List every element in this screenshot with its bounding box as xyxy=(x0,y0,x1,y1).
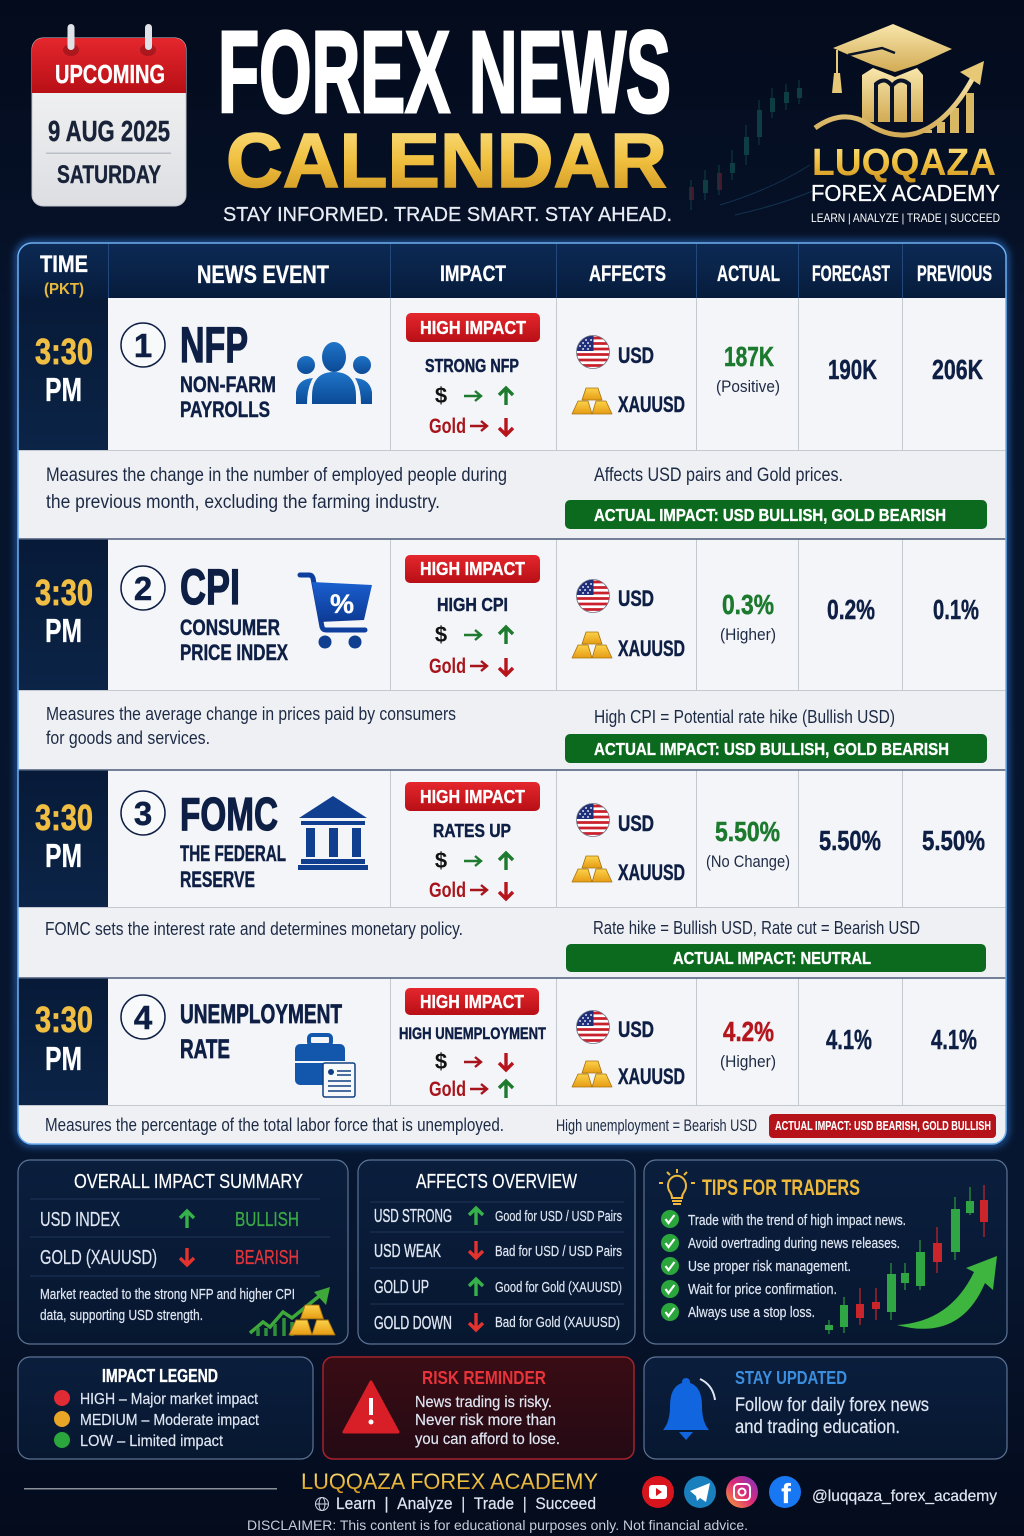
event number xyxy=(121,566,165,610)
gold up row: GOLD UP xyxy=(374,1277,429,1297)
actual: 0.3% xyxy=(722,589,774,620)
market summary text: Market reacted to the strong NFP and higher CPI xyxy=(40,1286,295,1303)
calendar badge xyxy=(32,24,186,206)
actual: 4.2% xyxy=(723,1016,774,1047)
table header: ACTUAL xyxy=(717,261,780,286)
affects: USD xyxy=(618,811,654,836)
impact: HIGH IMPACT xyxy=(420,559,525,579)
logo: FOREX ACADEMY xyxy=(811,180,1000,206)
previous: 4.1% xyxy=(931,1024,977,1055)
description xyxy=(46,465,507,513)
table header: (PKT) xyxy=(44,281,84,298)
table header xyxy=(40,251,992,298)
panel: overall impact summary xyxy=(18,1160,348,1344)
gold row: BEARISH xyxy=(235,1247,299,1269)
impact: HIGH CPI xyxy=(437,595,508,615)
row 1: NFP xyxy=(35,313,987,529)
event name xyxy=(180,999,342,1064)
icon: warning triangle xyxy=(344,1382,398,1432)
actual xyxy=(720,1016,776,1071)
previous: 0.1% xyxy=(933,594,979,625)
previous: 5.50% xyxy=(922,825,985,856)
forecast: 0.2% xyxy=(827,594,875,625)
gold row xyxy=(40,1247,299,1269)
actual: (Higher) xyxy=(720,1052,776,1071)
background chart: faint candlesticks xyxy=(689,80,815,215)
affects: XAUUSD xyxy=(618,1064,685,1089)
table header: IMPACT xyxy=(440,261,506,286)
risk text: Never risk more than xyxy=(415,1412,556,1429)
calendar date: 9 AUG 2025 xyxy=(48,116,170,148)
title: CALENDAR xyxy=(226,118,667,204)
row 3: FOMC xyxy=(35,782,986,972)
icon: gold bars and chart xyxy=(250,1287,335,1336)
previous: 206K xyxy=(932,354,983,385)
impact xyxy=(405,555,540,678)
event name: RATE xyxy=(180,1034,230,1064)
event name: NFP xyxy=(180,317,248,373)
icon: shopping cart: % xyxy=(330,589,354,619)
forecast: 4.1% xyxy=(826,1024,872,1055)
event number: 3 xyxy=(134,795,152,832)
social icons: f xyxy=(781,1478,791,1509)
event name: RESERVE xyxy=(180,867,255,892)
actual: 5.50% xyxy=(715,816,780,847)
event name: PAYROLLS xyxy=(180,397,270,422)
risk text xyxy=(415,1394,560,1448)
market note: High unemployment = Bearish USD xyxy=(556,1116,757,1135)
event number xyxy=(121,791,165,835)
footer brand: Learn | Analyze | Trade | Succeed xyxy=(336,1494,596,1513)
forecast: 190K xyxy=(828,354,877,385)
tips list: Trade with the trend of high impact news. xyxy=(688,1212,906,1229)
time xyxy=(35,999,93,1077)
USD weak row: Bad for USD / USD Pairs xyxy=(495,1243,622,1260)
icon: bell xyxy=(663,1378,715,1440)
description: the previous month, excluding the farming industry. xyxy=(46,492,440,513)
title: FOREX NEWS xyxy=(218,7,671,137)
event name: PRICE INDEX xyxy=(180,640,288,665)
USD index row xyxy=(40,1209,299,1231)
impact: $ xyxy=(435,383,447,408)
event name: NON-FARM xyxy=(180,372,276,397)
event number xyxy=(121,995,165,1039)
impact: $ xyxy=(435,1049,447,1074)
impact xyxy=(406,313,540,438)
table header: NEWS EVENT xyxy=(197,261,329,289)
table header: TIME xyxy=(40,251,88,278)
impact: Gold xyxy=(429,415,466,438)
actual xyxy=(720,589,776,644)
actual impact banner xyxy=(566,944,986,972)
gold up row: Good for Gold (XAUUSD) xyxy=(495,1279,622,1296)
market note: Affects USD pairs and Gold prices. xyxy=(594,465,843,486)
time xyxy=(35,331,93,408)
tips list: Always use a stop loss. xyxy=(688,1304,815,1321)
panel heading: TIPS FOR TRADERS xyxy=(702,1175,860,1200)
footer brand: LUQQAZA FOREX ACADEMY xyxy=(301,1469,598,1494)
calendar label: UPCOMING xyxy=(55,59,165,89)
footer brand xyxy=(24,1469,598,1513)
legend: medium: MEDIUM – Moderate impact xyxy=(80,1412,259,1429)
affects xyxy=(572,1010,685,1089)
row 4: Unemployment xyxy=(35,988,996,1138)
affects xyxy=(572,579,685,661)
actual xyxy=(706,816,790,871)
time: PM xyxy=(45,1040,82,1077)
table header: AFFECTS xyxy=(589,261,666,286)
market summary text: data, supporting USD strength. xyxy=(40,1307,203,1324)
table header: FORECAST xyxy=(812,261,890,286)
affects: USD xyxy=(618,586,654,611)
impact: $ xyxy=(435,622,447,647)
title xyxy=(218,7,671,204)
USD weak row xyxy=(374,1241,622,1261)
affects: USD xyxy=(618,1017,654,1042)
market note: Rate hike = Bullish USD, Rate cut = Bearish USD xyxy=(593,918,920,938)
actual: (No Change) xyxy=(706,852,790,871)
event number: 2 xyxy=(134,570,152,607)
event name xyxy=(180,788,286,892)
legend: low: LOW – Limited impact xyxy=(80,1433,223,1450)
event number: 4 xyxy=(134,999,153,1036)
disclaimer: DISCLAIMER: This content is for educational purposes only. Not financial advice. xyxy=(247,1517,748,1533)
impact: Gold xyxy=(429,1078,466,1101)
description: Measures the change in the number of employed people during xyxy=(46,465,507,486)
social handle: @luqqaza_forex_academy xyxy=(812,1488,997,1505)
time: PM xyxy=(45,612,82,649)
time: 3:30 xyxy=(35,797,93,838)
event name: CONSUMER xyxy=(180,615,280,640)
impact: HIGH UNEMPLOYMENT xyxy=(399,1024,546,1043)
icon: bank xyxy=(298,796,368,870)
impact: RATES UP xyxy=(433,821,511,841)
panel: affects overview xyxy=(358,1160,635,1344)
impact: HIGH IMPACT xyxy=(420,992,524,1012)
actual impact banner xyxy=(565,500,987,529)
description: for goods and services. xyxy=(46,728,210,748)
legend: high: HIGH – Major market impact xyxy=(80,1391,258,1408)
forecast: 5.50% xyxy=(819,825,881,856)
icon: shopping cart xyxy=(300,575,372,648)
impact: $ xyxy=(435,848,447,873)
icon: briefcase with resume xyxy=(295,1035,355,1097)
actual impact banner xyxy=(769,1114,996,1138)
event name: FOMC xyxy=(180,788,278,840)
USD index row: BULLISH xyxy=(235,1209,299,1231)
panel: calendar table xyxy=(18,243,1006,1144)
impact: HIGH IMPACT xyxy=(420,787,525,807)
tagline: STAY INFORMED. TRADE SMART. STAY AHEAD. xyxy=(223,204,672,226)
description: Measures the average change in prices paid by consumers xyxy=(46,704,456,724)
icon: light bulb xyxy=(659,1169,695,1204)
panel heading: IMPACT LEGEND xyxy=(102,1366,218,1386)
gold down row: Bad for Gold (XAUUSD) xyxy=(495,1314,620,1331)
event name xyxy=(180,317,276,422)
time: 3:30 xyxy=(35,331,93,372)
event name xyxy=(180,559,288,665)
logo xyxy=(811,24,1000,225)
actual impact banner: ACTUAL IMPACT: USD BULLISH, GOLD BEARISH xyxy=(594,505,946,525)
gold row: GOLD (XAUUSD) xyxy=(40,1247,157,1269)
impact: STRONG NFP xyxy=(425,356,519,376)
event number xyxy=(121,323,165,367)
description xyxy=(46,704,456,748)
event number: 1 xyxy=(134,327,152,364)
affects xyxy=(572,803,685,885)
event name: CPI xyxy=(180,559,240,615)
USD strong row: Good for USD / USD Pairs xyxy=(495,1208,622,1225)
tips list: Avoid overtrading during news releases. xyxy=(688,1235,900,1252)
time xyxy=(35,572,93,649)
icon: globe xyxy=(316,1498,328,1510)
affects: USD xyxy=(618,343,654,368)
impact xyxy=(399,988,546,1101)
USD strong row xyxy=(374,1206,622,1226)
market summary text xyxy=(40,1286,295,1324)
time: PM xyxy=(45,371,82,408)
follow text: and trading education. xyxy=(735,1417,900,1438)
actual: 187K xyxy=(724,341,774,372)
gold down row xyxy=(374,1313,620,1333)
time: 3:30 xyxy=(35,999,93,1040)
panel heading: RISK REMINDER xyxy=(422,1368,546,1388)
market note: High CPI = Potential rate hike (Bullish USD) xyxy=(594,707,895,727)
actual: (Positive) xyxy=(716,377,780,396)
icon: graduation cap and rising arrow xyxy=(815,24,984,135)
USD index row: USD INDEX xyxy=(40,1209,120,1231)
follow text xyxy=(735,1395,929,1438)
time: 3:30 xyxy=(35,572,93,613)
social icons xyxy=(642,1476,801,1509)
panel: impact legend xyxy=(18,1357,313,1459)
affects: XAUUSD xyxy=(618,636,685,661)
panel heading: AFFECTS OVERVIEW xyxy=(416,1171,577,1193)
tips list: Use proper risk management. xyxy=(688,1258,851,1275)
affects xyxy=(572,335,685,417)
logo: LUQQAZA xyxy=(812,142,996,184)
calendar weekday: SATURDAY xyxy=(57,161,161,189)
panel heading: STAY UPDATED xyxy=(735,1368,847,1388)
actual impact banner xyxy=(565,734,987,763)
description: Measures the percentage of the total labor force that is unemployed. xyxy=(45,1115,504,1135)
time xyxy=(35,797,93,874)
impact xyxy=(405,782,540,902)
row 2: CPI xyxy=(35,555,987,763)
affects: XAUUSD xyxy=(618,392,685,417)
candlestick chart with arrow xyxy=(825,1185,997,1334)
actual impact banner: ACTUAL IMPACT: NEUTRAL xyxy=(673,948,871,968)
risk text: you can afford to lose. xyxy=(415,1431,560,1448)
risk text: News trading is risky. xyxy=(415,1394,552,1411)
actual xyxy=(716,341,780,396)
gold up row xyxy=(374,1277,622,1297)
panel: stay updated xyxy=(644,1357,1007,1459)
impact: Gold xyxy=(429,655,466,678)
panel heading: OVERALL IMPACT SUMMARY xyxy=(74,1171,303,1193)
panel: risk reminder xyxy=(323,1357,634,1459)
actual impact banner: ACTUAL IMPACT: USD BULLISH, GOLD BEARISH xyxy=(594,739,949,759)
description: FOMC sets the interest rate and determines monetary policy. xyxy=(45,919,463,939)
impact: Gold xyxy=(429,879,466,902)
tips list: Wait for price confirmation. xyxy=(688,1281,837,1298)
event name: THE FEDERAL xyxy=(180,841,286,866)
icon: people xyxy=(296,342,372,404)
tips list xyxy=(661,1210,906,1321)
gold down row: GOLD DOWN xyxy=(374,1313,452,1333)
time: PM xyxy=(45,837,82,874)
USD strong row: USD STRONG xyxy=(374,1206,452,1226)
affects: XAUUSD xyxy=(618,860,685,885)
panel: tips for traders xyxy=(644,1160,1007,1344)
follow text: Follow for daily forex news xyxy=(735,1395,929,1416)
USD weak row: USD WEAK xyxy=(374,1241,441,1261)
impact: HIGH IMPACT xyxy=(420,318,526,338)
event name: UNEMPLOYMENT xyxy=(180,999,342,1029)
actual: (Higher) xyxy=(720,625,776,644)
